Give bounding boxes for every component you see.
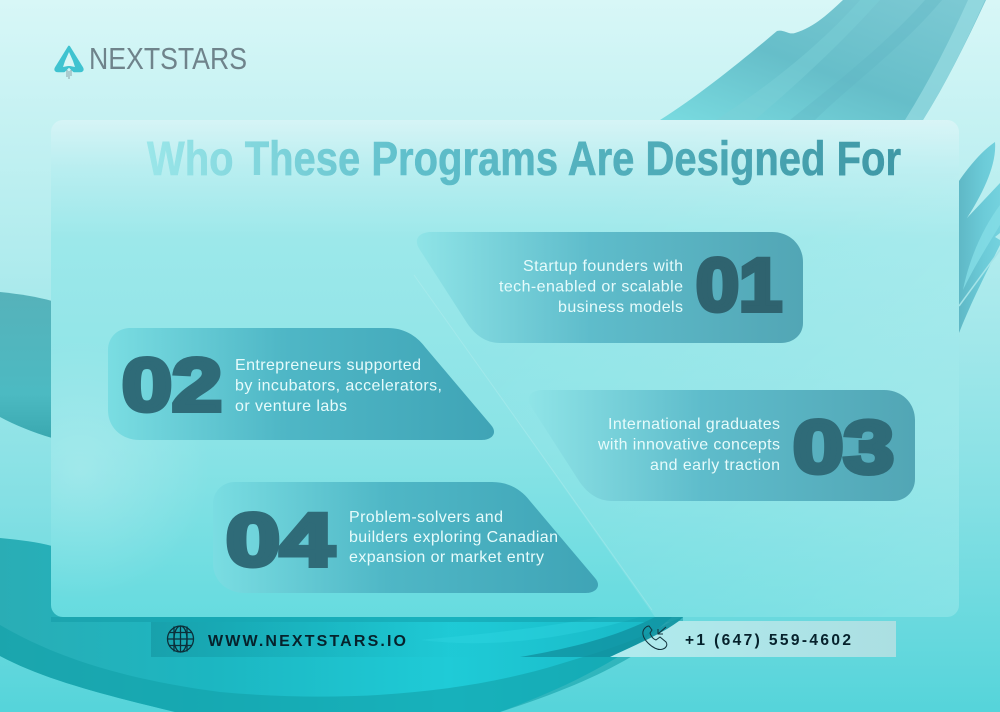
text 04: builders exploring Canadian	[349, 529, 558, 546]
icon: phone	[643, 626, 667, 650]
card 02	[108, 328, 494, 440]
icon: globe	[168, 626, 194, 652]
card 02 shape	[108, 328, 494, 440]
text 01: tech-enabled or scalable	[499, 278, 683, 296]
logo	[56, 41, 247, 79]
text 03: with innovative concepts	[597, 436, 780, 454]
text 03	[597, 416, 780, 474]
text 04: expansion or market entry	[349, 549, 544, 566]
card 01	[417, 232, 803, 343]
number 01: 01	[696, 244, 782, 326]
card 04 shape	[213, 482, 598, 593]
text 01: Startup founders with	[523, 258, 683, 275]
text 03: International graduates	[608, 416, 780, 433]
text 03: and early traction	[650, 457, 780, 474]
card 03 shape	[529, 390, 915, 501]
number 02: 02	[122, 344, 222, 426]
card 04	[213, 482, 598, 593]
top right brush swoosh	[660, 0, 986, 120]
left brush swoosh	[0, 292, 52, 438]
logo wordmark: NEXTSTARS	[89, 41, 247, 76]
text 02: Entrepreneurs supported	[235, 357, 421, 374]
text 02	[235, 357, 442, 415]
text 01: business models	[558, 299, 683, 316]
phone bar background	[610, 621, 896, 657]
number 03: 03	[793, 406, 894, 488]
text 04	[349, 509, 558, 566]
right brush swoosh	[959, 142, 1000, 333]
text 02: or venture labs	[235, 398, 347, 415]
website bar background	[151, 622, 621, 657]
website bar	[151, 622, 621, 657]
website text: WWW.NEXTSTARS.IO	[208, 633, 406, 650]
text 04: Problem-solvers and	[349, 509, 503, 526]
icon: rocket arrow	[56, 47, 82, 79]
phone text: +1 (647) 559-4602	[685, 632, 851, 649]
bottom brush swoosh	[0, 538, 690, 712]
number 04: 04	[226, 498, 334, 582]
main glass panel	[0, 120, 959, 617]
text 02: by incubators, accelerators,	[235, 378, 442, 394]
card 01 shape	[417, 232, 803, 343]
card 03	[529, 390, 915, 501]
phone bar	[610, 621, 896, 657]
text 01	[499, 258, 683, 316]
